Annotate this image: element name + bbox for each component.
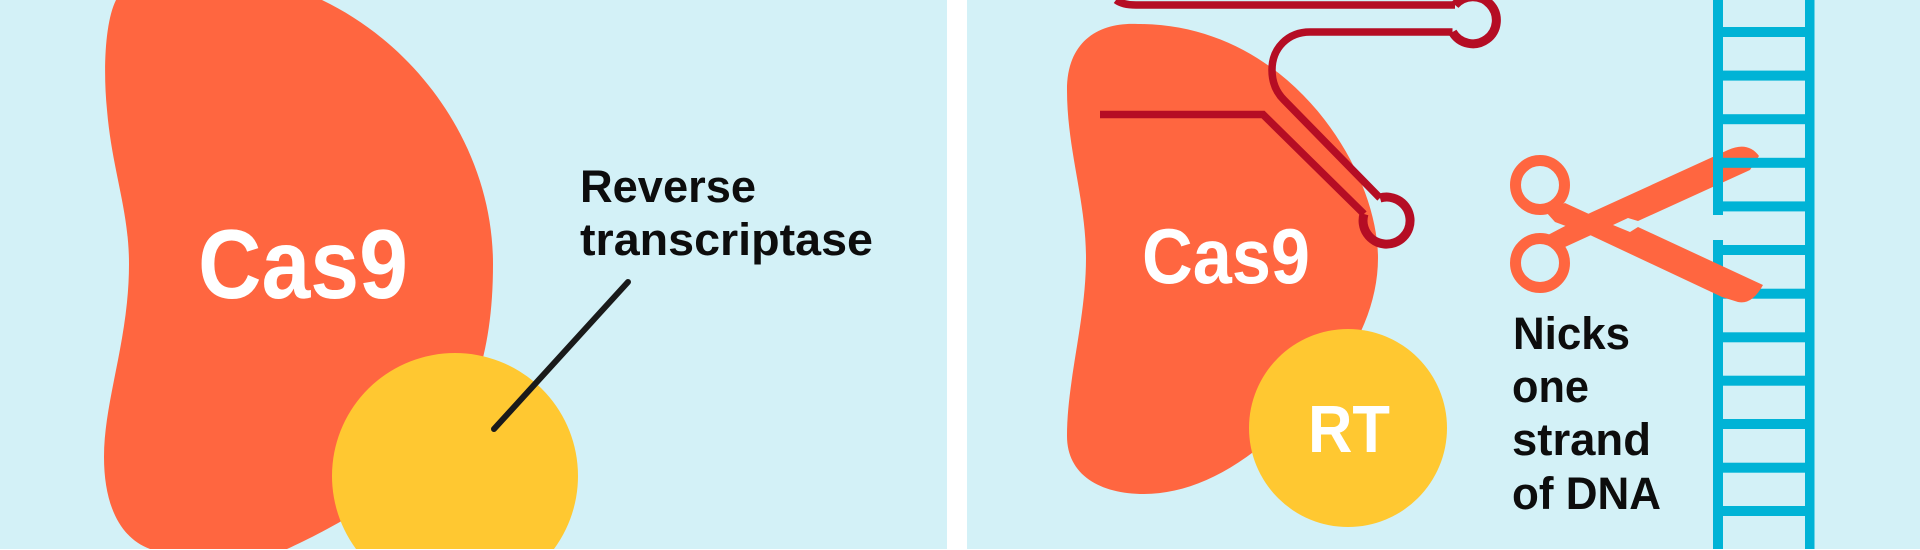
Cas9 protein blob bbox=[1067, 24, 1378, 494]
nick label bbox=[1512, 308, 1661, 519]
DNA ladder bbox=[1713, 0, 1814, 549]
panel: nicking one DNA strand bbox=[967, 0, 1920, 549]
Cas9 label: Cas9 bbox=[198, 209, 408, 319]
Cas9 label: Cas9 bbox=[1142, 212, 1310, 300]
RT label: RT bbox=[1308, 392, 1390, 467]
nick label: of DNA bbox=[1512, 468, 1661, 519]
pointer line bbox=[494, 282, 628, 429]
scissors: upper blade bbox=[1546, 147, 1759, 247]
nick label: strand bbox=[1512, 414, 1651, 465]
scissors: lower blade and rings bbox=[1516, 160, 1763, 302]
nick label: Nicks bbox=[1513, 308, 1630, 359]
reverse transcriptase label: transcriptase bbox=[580, 214, 873, 265]
RT circle bbox=[1249, 329, 1447, 527]
reverse transcriptase label: Reverse bbox=[580, 161, 756, 212]
panel: Cas9 with reverse transcriptase bbox=[0, 0, 947, 549]
reverse transcriptase label bbox=[580, 161, 873, 265]
nick label: one bbox=[1512, 361, 1589, 412]
reverse transcriptase circle bbox=[332, 353, 578, 549]
guide RNA bbox=[1100, 0, 1496, 244]
Cas9 protein blob bbox=[104, 0, 493, 549]
